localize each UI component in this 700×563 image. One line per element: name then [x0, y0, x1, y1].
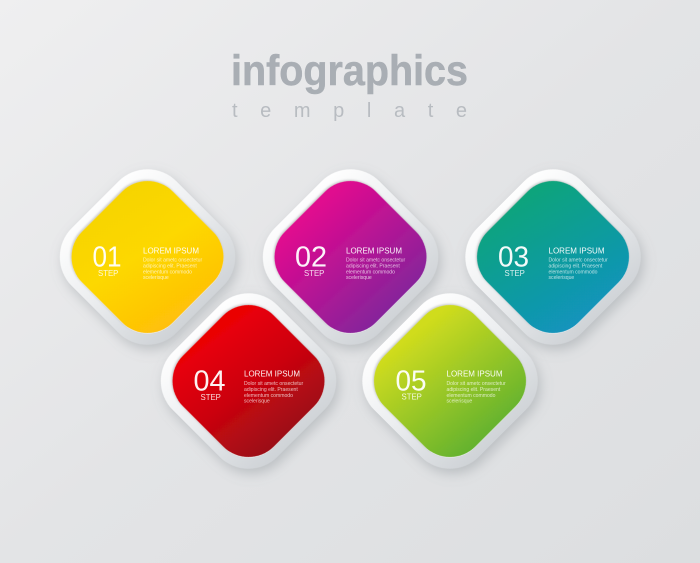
body text: Dolor sit ametc onsectetur [143, 258, 202, 264]
panel: step 02 magenta [246, 152, 455, 362]
title: infographics [231, 47, 468, 95]
title [231, 47, 468, 122]
step number: 01 [92, 242, 122, 274]
step number: 03 [498, 242, 529, 274]
body text: scelerisque [446, 398, 472, 404]
body text: scelerisque [244, 398, 270, 404]
body text: adipiscing elit. Praesent [446, 387, 501, 393]
body text: scelerisque [143, 275, 169, 281]
body text: elementum commodo [548, 270, 598, 276]
heading: LOREM IPSUM [143, 245, 199, 255]
heading: LOREM IPSUM [548, 245, 604, 255]
panel: step 04 red [144, 276, 353, 486]
body text: adipiscing elit. Praesent [143, 264, 197, 270]
body text [548, 258, 608, 281]
panel: step 05 green [345, 276, 555, 486]
panel: step 01 yellow [43, 152, 252, 362]
body text: elementum commodo [244, 393, 293, 399]
body text: elementum commodo [143, 270, 192, 276]
step label: STEP [200, 393, 221, 402]
heading: LOREM IPSUM [446, 368, 502, 378]
panel: step 03 teal [448, 152, 658, 362]
step label: STEP [98, 269, 118, 278]
subtitle: template [232, 100, 467, 122]
body text: Dolor sit ametc onsectetur [244, 381, 303, 387]
body text: adipiscing elit. Praesent [244, 387, 298, 393]
body text [143, 258, 202, 281]
step number: 02 [295, 242, 327, 274]
step number: 05 [396, 366, 426, 398]
heading: LOREM IPSUM [346, 245, 402, 255]
body text: elementum commodo [346, 270, 395, 276]
heading: LOREM IPSUM [244, 368, 300, 378]
body text: scelerisque [346, 275, 372, 281]
body text: Dolor sit ametc onsectetur [346, 258, 405, 264]
step number: 04 [194, 366, 226, 398]
body text: elementum commodo [446, 393, 496, 399]
body text [346, 258, 405, 281]
body text: scelerisque [548, 275, 574, 281]
step label: STEP [304, 269, 324, 278]
body text [446, 381, 506, 404]
body text: adipiscing elit. Praesent [548, 264, 603, 270]
body text: Dolor sit ametc onsectetur [548, 258, 608, 264]
body text: adipiscing elit. Praesent [346, 264, 400, 270]
step label: STEP [402, 392, 422, 402]
step label: STEP [504, 269, 525, 278]
body text [244, 381, 303, 404]
body text: Dolor sit ametc onsectetur [446, 381, 506, 387]
